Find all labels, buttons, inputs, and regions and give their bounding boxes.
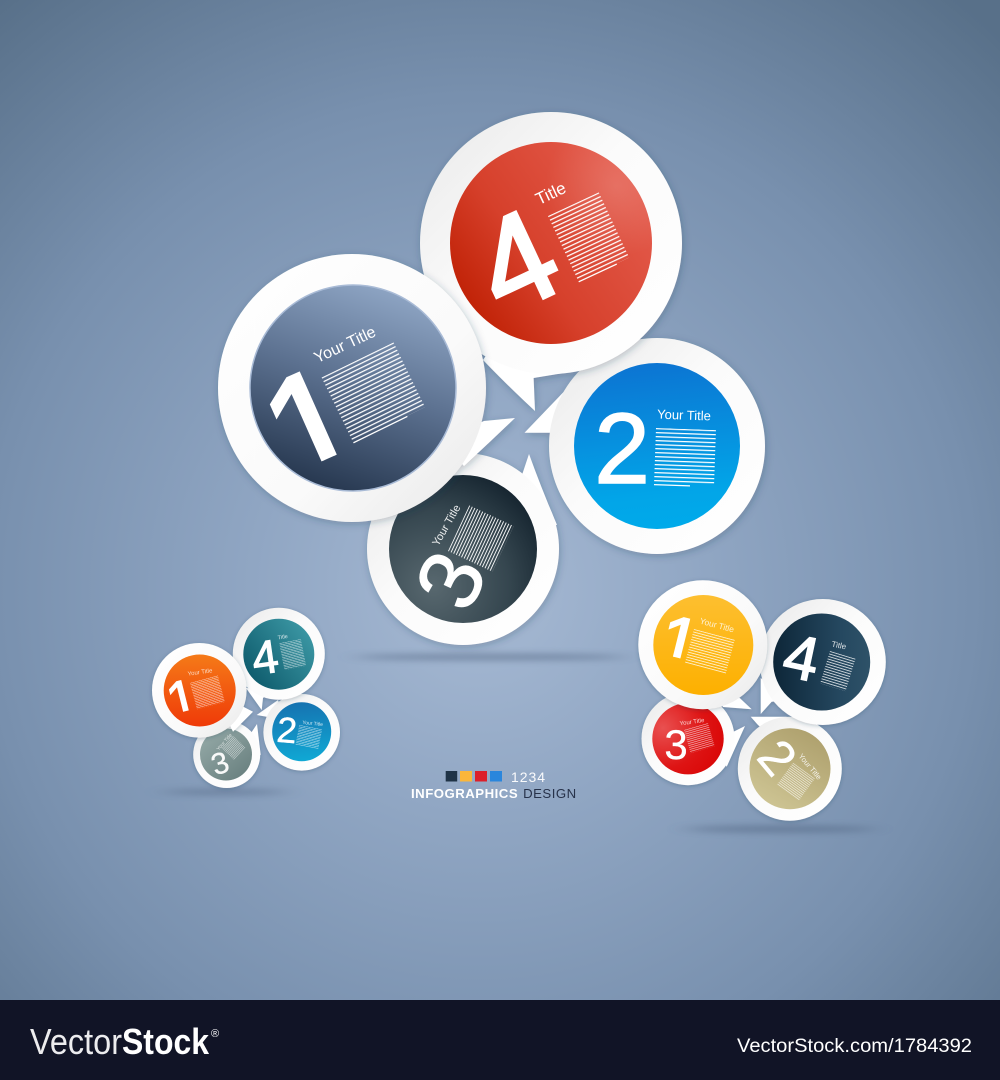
main step cluster bbox=[218, 112, 765, 645]
footer bar bbox=[0, 1000, 1000, 1080]
title: Your Title bbox=[302, 720, 323, 728]
title: Your Title bbox=[797, 752, 823, 781]
text lines bbox=[777, 763, 815, 800]
title: Your Title bbox=[187, 668, 213, 678]
ring with pointer bbox=[420, 112, 682, 411]
ring with pointer bbox=[642, 692, 745, 785]
step 2 badge bbox=[524, 338, 765, 554]
title: Title bbox=[831, 640, 848, 652]
numeral: 2 bbox=[747, 729, 808, 786]
text lines bbox=[322, 342, 426, 443]
title: Your Title bbox=[679, 718, 705, 727]
small step 4 bbox=[760, 599, 886, 725]
disc bbox=[200, 728, 252, 780]
small step 1 bbox=[638, 580, 767, 709]
disc bbox=[450, 142, 652, 344]
ring with pointer bbox=[257, 694, 340, 771]
text lines bbox=[820, 651, 855, 691]
ring with pointer bbox=[638, 580, 767, 709]
disc bbox=[272, 702, 331, 761]
small step 2 bbox=[257, 694, 340, 771]
registered mark: ® bbox=[211, 1028, 219, 1040]
numeral: 1 bbox=[237, 329, 386, 522]
numeral: 3 bbox=[664, 721, 688, 768]
numeral: 1 bbox=[651, 599, 708, 684]
text lines bbox=[685, 629, 735, 674]
ring with pointer bbox=[152, 643, 253, 738]
ring with pointer bbox=[760, 599, 886, 725]
title: Your Title bbox=[216, 733, 234, 752]
numeral: 4 bbox=[777, 621, 825, 696]
ring with pointer bbox=[233, 608, 325, 710]
ring with pointer bbox=[193, 721, 261, 788]
text lines bbox=[448, 505, 514, 572]
disc bbox=[750, 728, 830, 809]
numeral: 2 bbox=[275, 709, 299, 751]
numeral: 1 bbox=[160, 667, 204, 733]
text lines bbox=[222, 736, 245, 760]
footer brand: VectorStock bbox=[30, 1021, 210, 1062]
text lines bbox=[684, 723, 715, 753]
ring with pointer bbox=[738, 717, 842, 821]
disc bbox=[389, 475, 537, 623]
step 1 badge bbox=[218, 254, 515, 522]
logo: infographics design bbox=[411, 769, 577, 801]
floor shadow: left cluster bbox=[163, 789, 287, 795]
title: Your Title bbox=[430, 503, 463, 548]
numeral: 3 bbox=[395, 537, 506, 623]
logo wordmark: INFOGRAPHICS DESIGN bbox=[411, 786, 577, 801]
title: Your Title bbox=[657, 407, 711, 423]
ring with pointer bbox=[218, 254, 515, 522]
title: Title bbox=[277, 634, 288, 642]
disc bbox=[250, 285, 456, 491]
title: Title bbox=[532, 178, 569, 209]
numeral: 2 bbox=[594, 393, 650, 505]
disc bbox=[773, 614, 870, 710]
title: Your Title bbox=[312, 324, 379, 367]
floor shadow: right cluster bbox=[685, 826, 875, 832]
small step 1 bbox=[152, 643, 253, 738]
text lines bbox=[295, 725, 322, 749]
numeral: 4 bbox=[248, 629, 282, 685]
right small cluster bbox=[638, 580, 886, 821]
disc bbox=[574, 363, 740, 529]
numeral: 4 bbox=[453, 179, 580, 342]
small step 4 bbox=[233, 608, 325, 710]
small step 3 bbox=[642, 692, 745, 785]
disc bbox=[652, 703, 724, 774]
text lines bbox=[548, 192, 630, 282]
small step 3 bbox=[193, 721, 261, 788]
step 4 badge bbox=[420, 112, 682, 411]
title: Your Title bbox=[699, 616, 736, 634]
text lines bbox=[279, 639, 306, 670]
disc bbox=[243, 619, 314, 690]
small step 2 bbox=[738, 717, 842, 821]
left small cluster bbox=[152, 608, 340, 788]
step 3 badge bbox=[367, 453, 559, 645]
ring with pointer bbox=[367, 453, 559, 645]
footer image id: VectorStock.com/1784392 bbox=[737, 1036, 972, 1057]
ring with pointer bbox=[524, 338, 765, 554]
disc bbox=[653, 595, 753, 695]
disc bbox=[164, 654, 236, 726]
logo digits: 1234 bbox=[511, 769, 545, 785]
text lines bbox=[190, 676, 225, 709]
numeral: 3 bbox=[207, 746, 233, 782]
colour swatches bbox=[446, 771, 502, 782]
floor shadow: main cluster bbox=[355, 654, 625, 660]
text lines bbox=[654, 428, 716, 487]
